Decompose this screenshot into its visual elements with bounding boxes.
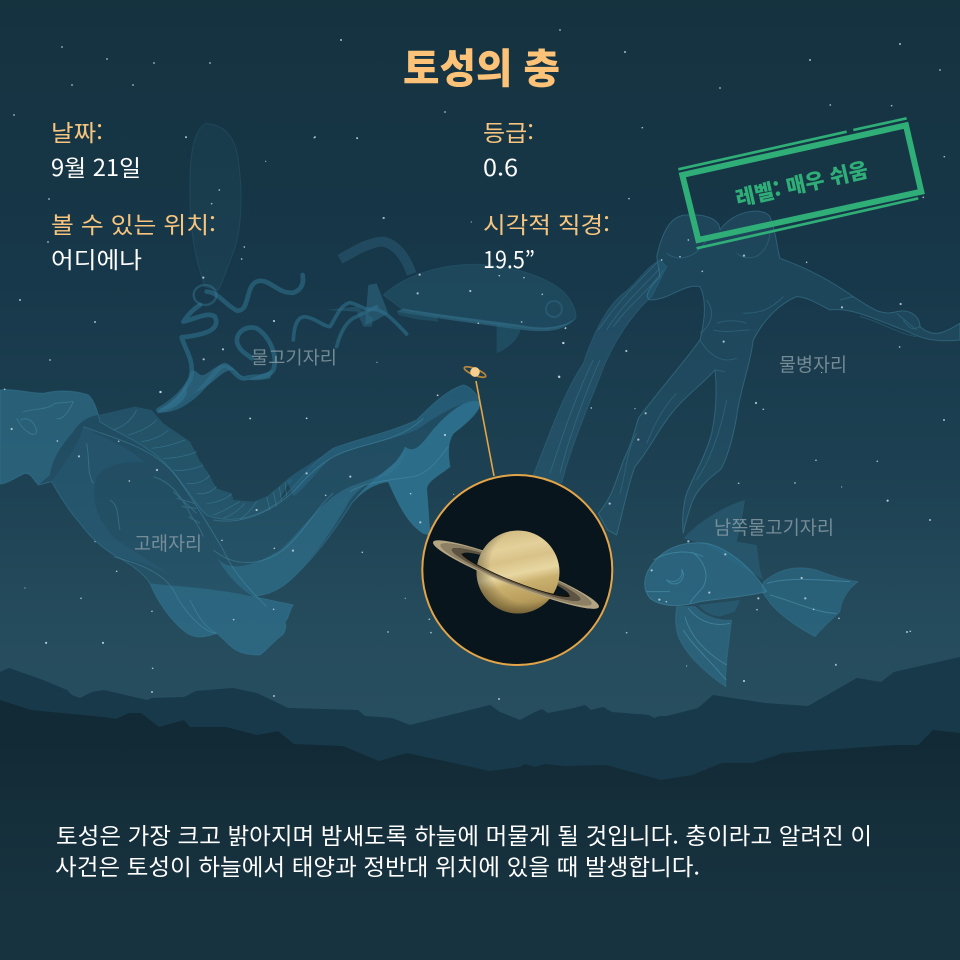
constellation: Aquarius (물병자리) (533, 211, 960, 535)
description text (55, 817, 872, 882)
info: magnitude: 등급: (483, 114, 534, 148)
constellation label: 물고기자리: 물고기자리 (251, 344, 337, 370)
constellation label: 남쪽물고기자리: 남쪽물고기자리 (714, 513, 834, 540)
info: apparent diameter: 19.5” (483, 241, 535, 275)
description text: 토성은 가장 크고 밝아지며 밤새도록 하늘에 머물게 될 것입니다. 충이라고 알려진 이 (56, 817, 872, 851)
info: visibility (51, 206, 216, 275)
constellation label: 물병자리: 물병자리 (779, 350, 847, 377)
info: visibility: 어디에나 (51, 241, 142, 275)
description text: 사건은 토성이 하늘에서 태양과 정반대 위치에 있을 때 발생합니다. (55, 848, 700, 882)
info: date: 9월 21일 (51, 149, 141, 183)
pointer line to Saturn (476, 381, 494, 476)
constellation: Cetus (고래자리) (0, 365, 480, 655)
constellation label: 고래자리: 고래자리 (134, 529, 202, 556)
info: visibility: 볼 수 있는 위치: (51, 206, 216, 240)
info: magnitude: 0.6 (483, 149, 518, 183)
title: 토성의 충 (403, 35, 560, 95)
info: apparent diameter (483, 206, 610, 275)
icon: small Saturn marker (463, 363, 487, 381)
constellation: Pisces (물고기자리) (158, 123, 576, 410)
difficulty stamp: 레벨: 매우 쉬움 (732, 154, 871, 213)
info: date: 날짜: (51, 114, 103, 148)
mountains: near ridge (0, 700, 960, 960)
info: magnitude (483, 114, 534, 183)
constellation: Piscis Austrinus (남쪽물고기자리) (645, 500, 858, 687)
mountains: far ridge (0, 657, 960, 800)
Saturn detail circle (422, 475, 612, 665)
Saturn planet with rings (433, 530, 599, 616)
stars (4, 29, 945, 700)
info: date (51, 114, 141, 183)
difficulty stamp (678, 118, 921, 248)
info: apparent diameter: 시각적 직경: (483, 206, 610, 240)
